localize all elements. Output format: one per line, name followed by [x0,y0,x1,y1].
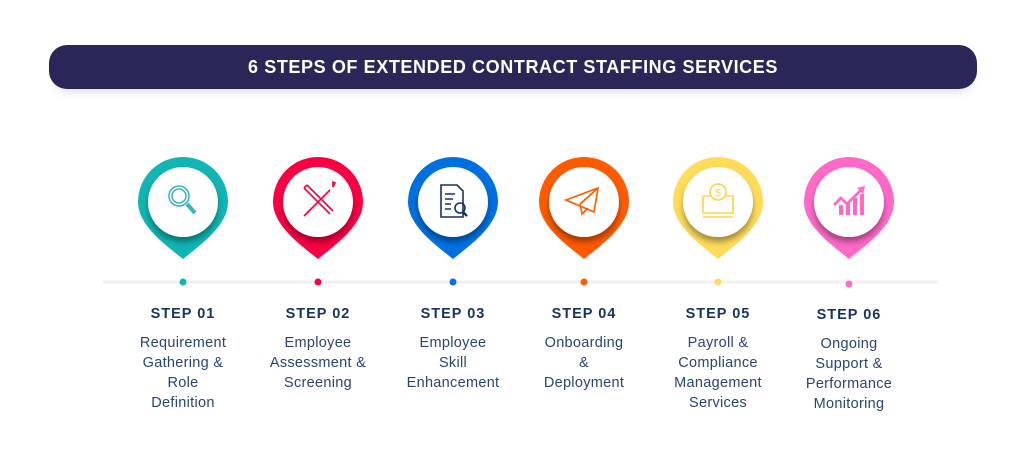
step 5 text: Compliance [678,355,758,371]
step 6 text: Ongoing [821,336,877,352]
step 4 text: Deployment [544,375,624,391]
pin 3 [408,157,498,286]
pin 5 [673,157,763,286]
step 3 text: Skill [439,355,467,371]
step 3 text: STEP 03 [421,306,485,322]
pin 5: $ [715,188,721,199]
step 2 text: Employee [285,335,351,351]
step 5 text: Payroll & [688,335,748,351]
step 2 text: Screening [284,375,352,391]
step 4 text: Onboarding [545,335,623,351]
timeline with pins [103,157,938,288]
step 5 text [674,306,762,411]
step 6 text: Monitoring [814,396,884,412]
step 5 text: Services [689,395,747,411]
step 1 text: Requirement [140,335,226,351]
step 2 text [270,306,366,391]
step 5 text: Management [674,375,762,391]
pin 6 [804,157,894,288]
step 3 text [407,306,499,391]
step 3 text: Enhancement [407,375,499,391]
step 1 text [140,306,226,411]
step 2 text: STEP 02 [286,306,350,322]
pin 1 [138,157,228,286]
step 6 text: Performance [806,376,892,392]
title: 6 STEPS OF EXTENDED CONTRACT STAFFING SERVICES [248,57,778,77]
step 4 text: STEP 04 [552,306,616,322]
step 4 text [544,306,624,391]
step 1 text: Definition [151,395,215,411]
step 6 text: STEP 06 [817,307,881,323]
step 1 text: Role [167,375,199,391]
step 1 text: STEP 01 [151,306,215,322]
step 4 text: & [579,355,589,371]
step 6 text: Support & [815,356,883,372]
step 3 text: Employee [420,335,486,351]
step 2 text: Assessment & [270,355,366,371]
pin 2 [273,157,363,286]
step 5 text: STEP 05 [686,306,750,322]
step 1 text: Gathering & [143,355,223,371]
title [49,45,977,89]
pin 4 [539,157,629,286]
step 6 text [806,307,892,412]
